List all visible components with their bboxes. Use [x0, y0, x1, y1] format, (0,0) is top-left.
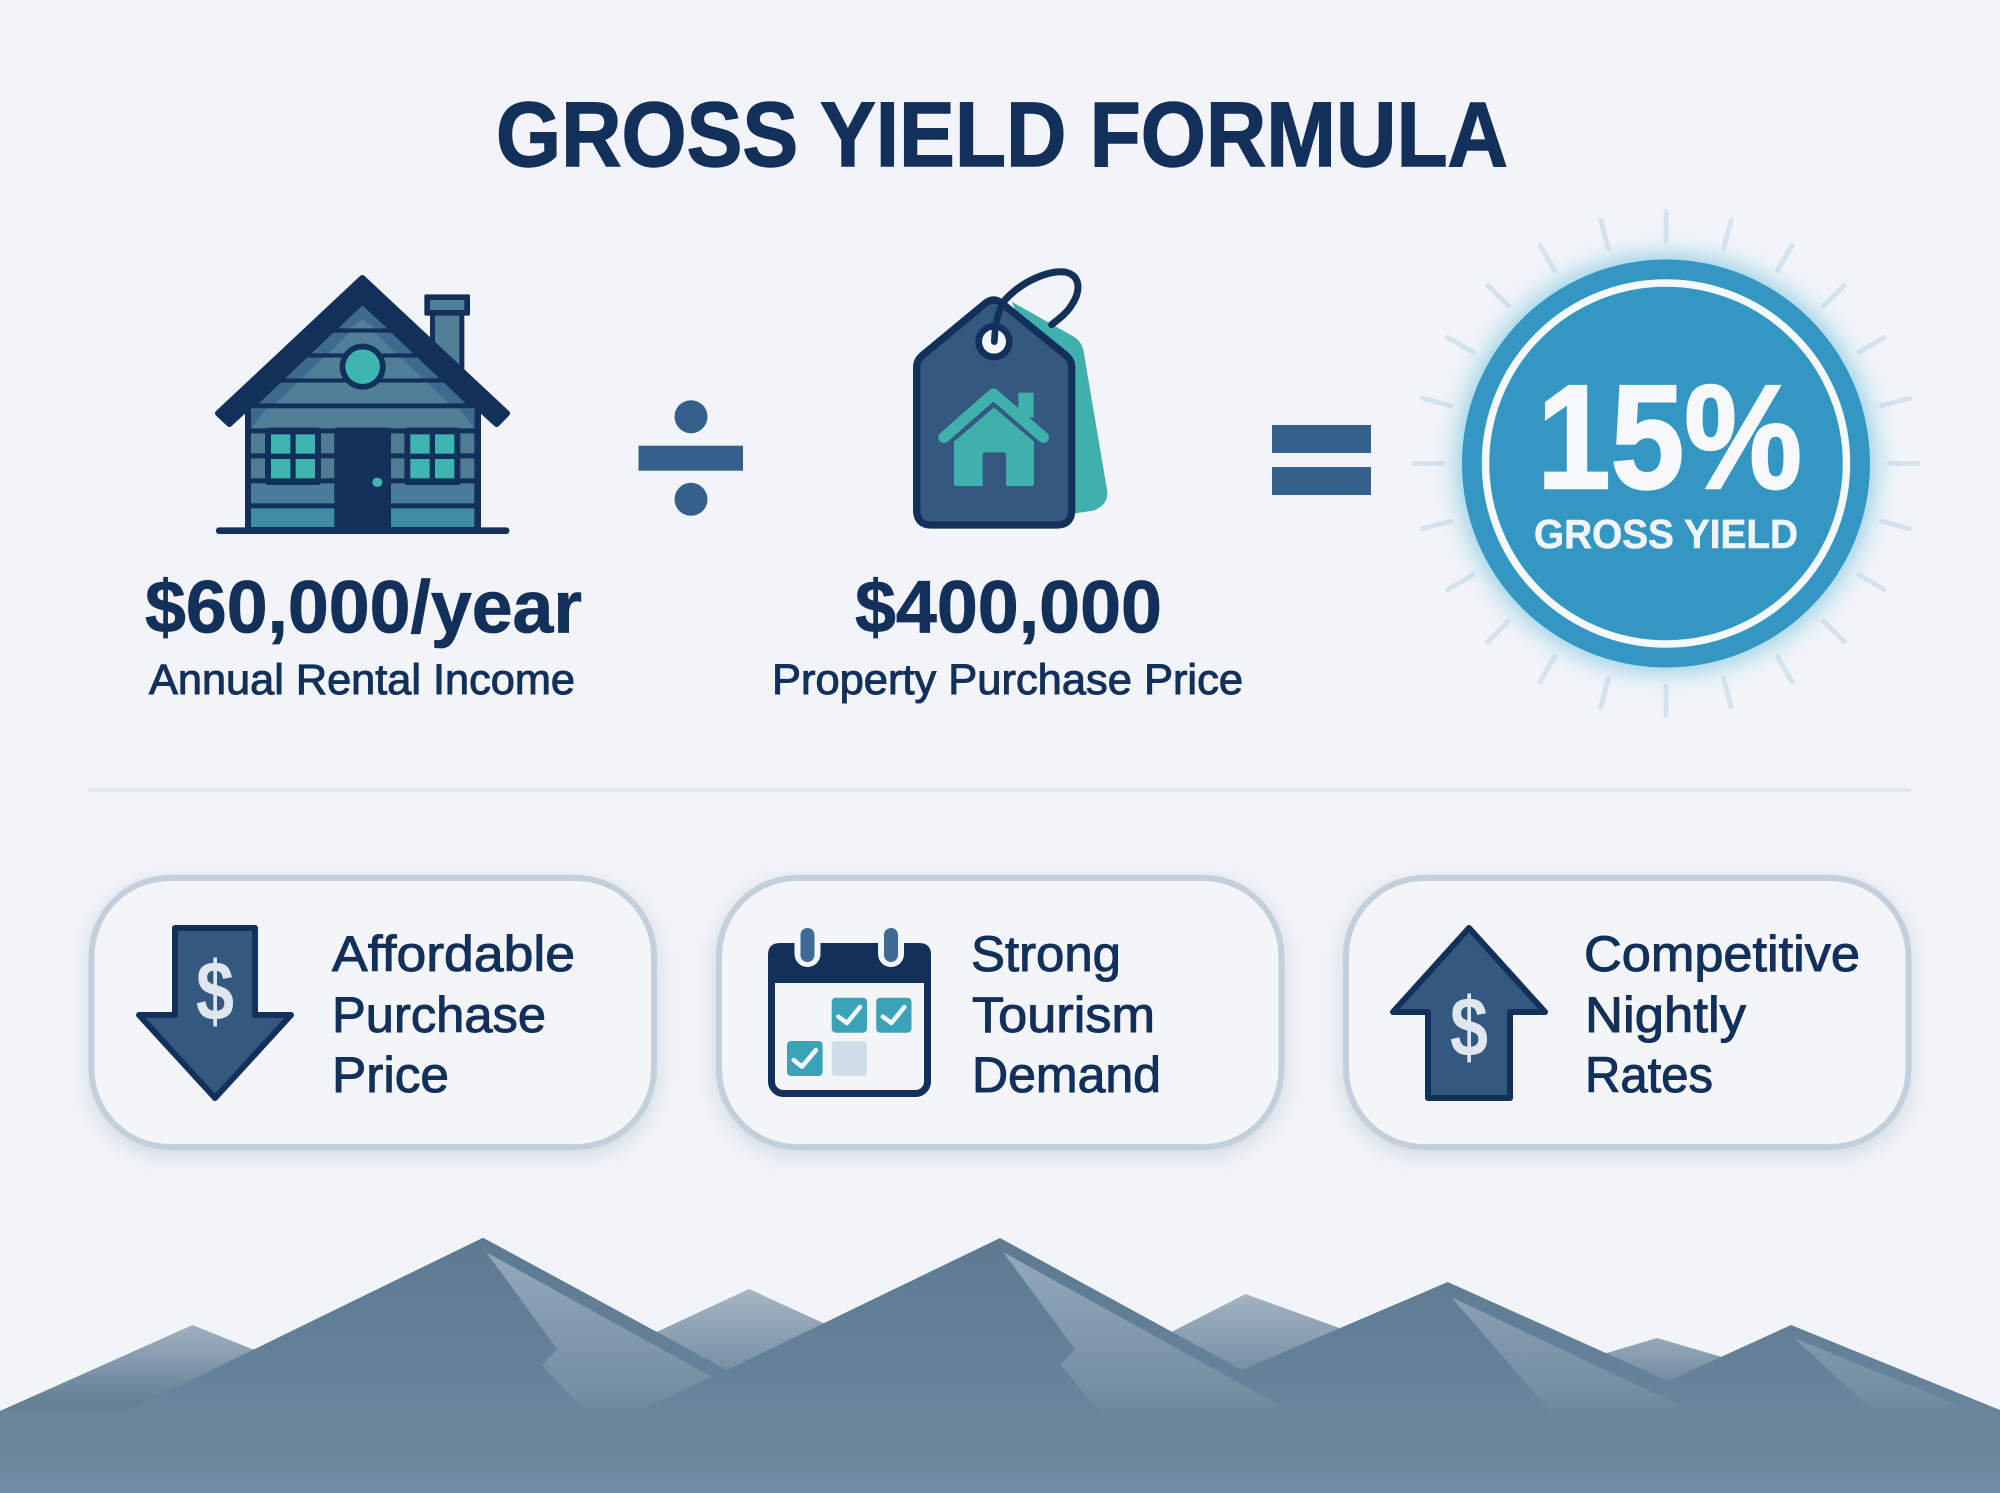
card text: Competitive — [1584, 925, 1860, 982]
card text: Affordable — [332, 925, 575, 982]
mountain range — [0, 1238, 2000, 1493]
icon: down arrow with dollar: $ — [196, 944, 234, 1038]
icon: house — [216, 278, 509, 534]
value: 15% — [1537, 355, 1802, 520]
tag string loop — [1005, 272, 1078, 325]
distant peaks — [0, 1289, 1780, 1411]
house walls and siding — [245, 402, 481, 530]
left window — [265, 428, 321, 485]
card text: Strong — [971, 925, 1121, 982]
icon: up arrow with dollar: $ — [1450, 980, 1488, 1074]
card text: Price — [332, 1046, 449, 1103]
card text — [332, 925, 575, 1103]
roof — [218, 278, 507, 424]
tag hole and string — [979, 300, 1009, 357]
equals symbol — [1272, 425, 1371, 495]
card text: Nightly — [1585, 986, 1747, 1043]
base haze — [0, 1395, 2000, 1493]
icon: up arrow with dollar — [1393, 928, 1545, 1098]
card text: Rates — [1585, 1046, 1713, 1103]
income label: Annual Rental Income — [149, 657, 575, 704]
tag body — [917, 300, 1072, 525]
front peaks — [0, 1238, 2000, 1493]
panel: affordable purchase price — [92, 878, 654, 1147]
ground line — [216, 527, 509, 534]
badge label: GROSS YIELD — [1534, 511, 1798, 557]
panel: competitive nightly rates — [1346, 878, 1908, 1147]
price label: Property Purchase Price — [772, 657, 1243, 704]
income value: $60,000/year — [145, 566, 582, 649]
icon: price tag — [917, 272, 1107, 525]
divide symbol — [638, 400, 743, 516]
icon: down arrow with dollar — [139, 928, 291, 1098]
round attic window — [340, 344, 386, 390]
door — [335, 428, 391, 530]
right window — [404, 428, 460, 485]
sunburst rays — [1414, 212, 1918, 716]
card text: Tourism — [972, 986, 1155, 1043]
card text: Demand — [972, 1046, 1161, 1103]
chimney — [424, 294, 470, 370]
card text — [1584, 925, 1860, 1103]
title: GROSS YIELD FORMULA — [496, 84, 1508, 186]
card text — [971, 925, 1161, 1103]
rear tag — [1012, 302, 1107, 513]
tag house glyph — [944, 393, 1043, 486]
card text: Purchase — [332, 986, 546, 1043]
panel: strong tourism demand — [719, 878, 1281, 1147]
gable — [245, 290, 480, 405]
icon: calendar — [768, 925, 931, 1094]
result badge: 15% gross yield — [1458, 256, 1874, 672]
price value: $400,000 — [855, 566, 1162, 649]
lit facets — [486, 1252, 1995, 1428]
